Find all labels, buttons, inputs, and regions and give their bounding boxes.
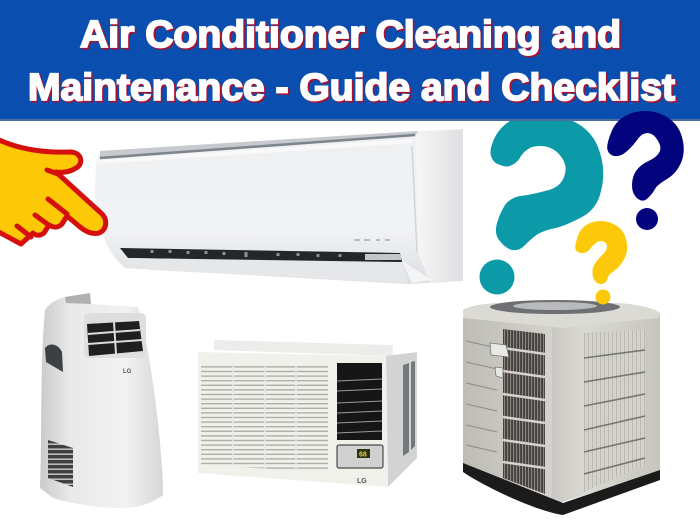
coil grille [503,329,545,494]
fin ridges [584,350,645,474]
icon: teal question mark [480,115,603,294]
side vents [403,361,415,456]
handle recess [45,345,63,372]
left face [463,312,552,505]
title line 1 shadow: Air Conditioner Cleaning and [82,16,622,58]
panel edge [412,146,417,252]
fan center [513,302,597,310]
vent louvres [87,321,143,356]
vent bars [337,379,382,433]
fan ring [490,300,620,314]
grille bars [503,348,545,468]
icon: yellow question mark [575,221,627,304]
left face ridges [466,341,497,452]
hinge clip [402,261,432,283]
top band [100,131,418,158]
window air conditioner: 68 [359,452,367,458]
wall-mounted split air conditioner [95,129,463,284]
vane notches [152,250,340,257]
right face [552,314,660,505]
title banner [0,0,700,121]
control boxes [490,343,509,378]
LG logo: LG [357,478,367,485]
fin panel [584,329,645,492]
portable air conditioner [40,293,163,508]
control panel [337,445,383,468]
indicator lights [354,239,390,241]
slat dividers [233,364,296,471]
top strip [214,340,393,356]
outdoor condenser unit [463,300,660,515]
front slats [201,363,328,472]
black base [463,463,660,515]
outlet highlight [365,254,401,260]
top vent [84,313,146,358]
exhaust top [65,293,91,304]
icon: pointing hand [0,138,106,244]
title line 1: Air Conditioner Cleaning and [80,14,621,56]
side panel [386,352,417,487]
side cap [416,129,463,282]
window air conditioner [198,340,417,487]
lower louvre [124,258,408,283]
air outlet slot [120,248,402,262]
panel highlight [98,141,412,162]
lower grille [48,440,73,487]
display [357,449,370,458]
finger crease lines [17,170,67,237]
icon: navy question mark [607,111,684,230]
lid [463,303,660,328]
dark vent [337,363,382,440]
front panel [198,352,388,487]
title line 2: Maintenance - Guide and Checklist [28,67,675,109]
LG logo: LG [123,369,132,375]
title line 2 shadow: Maintenance - Guide and Checklist [30,68,677,110]
top seam [100,135,415,158]
